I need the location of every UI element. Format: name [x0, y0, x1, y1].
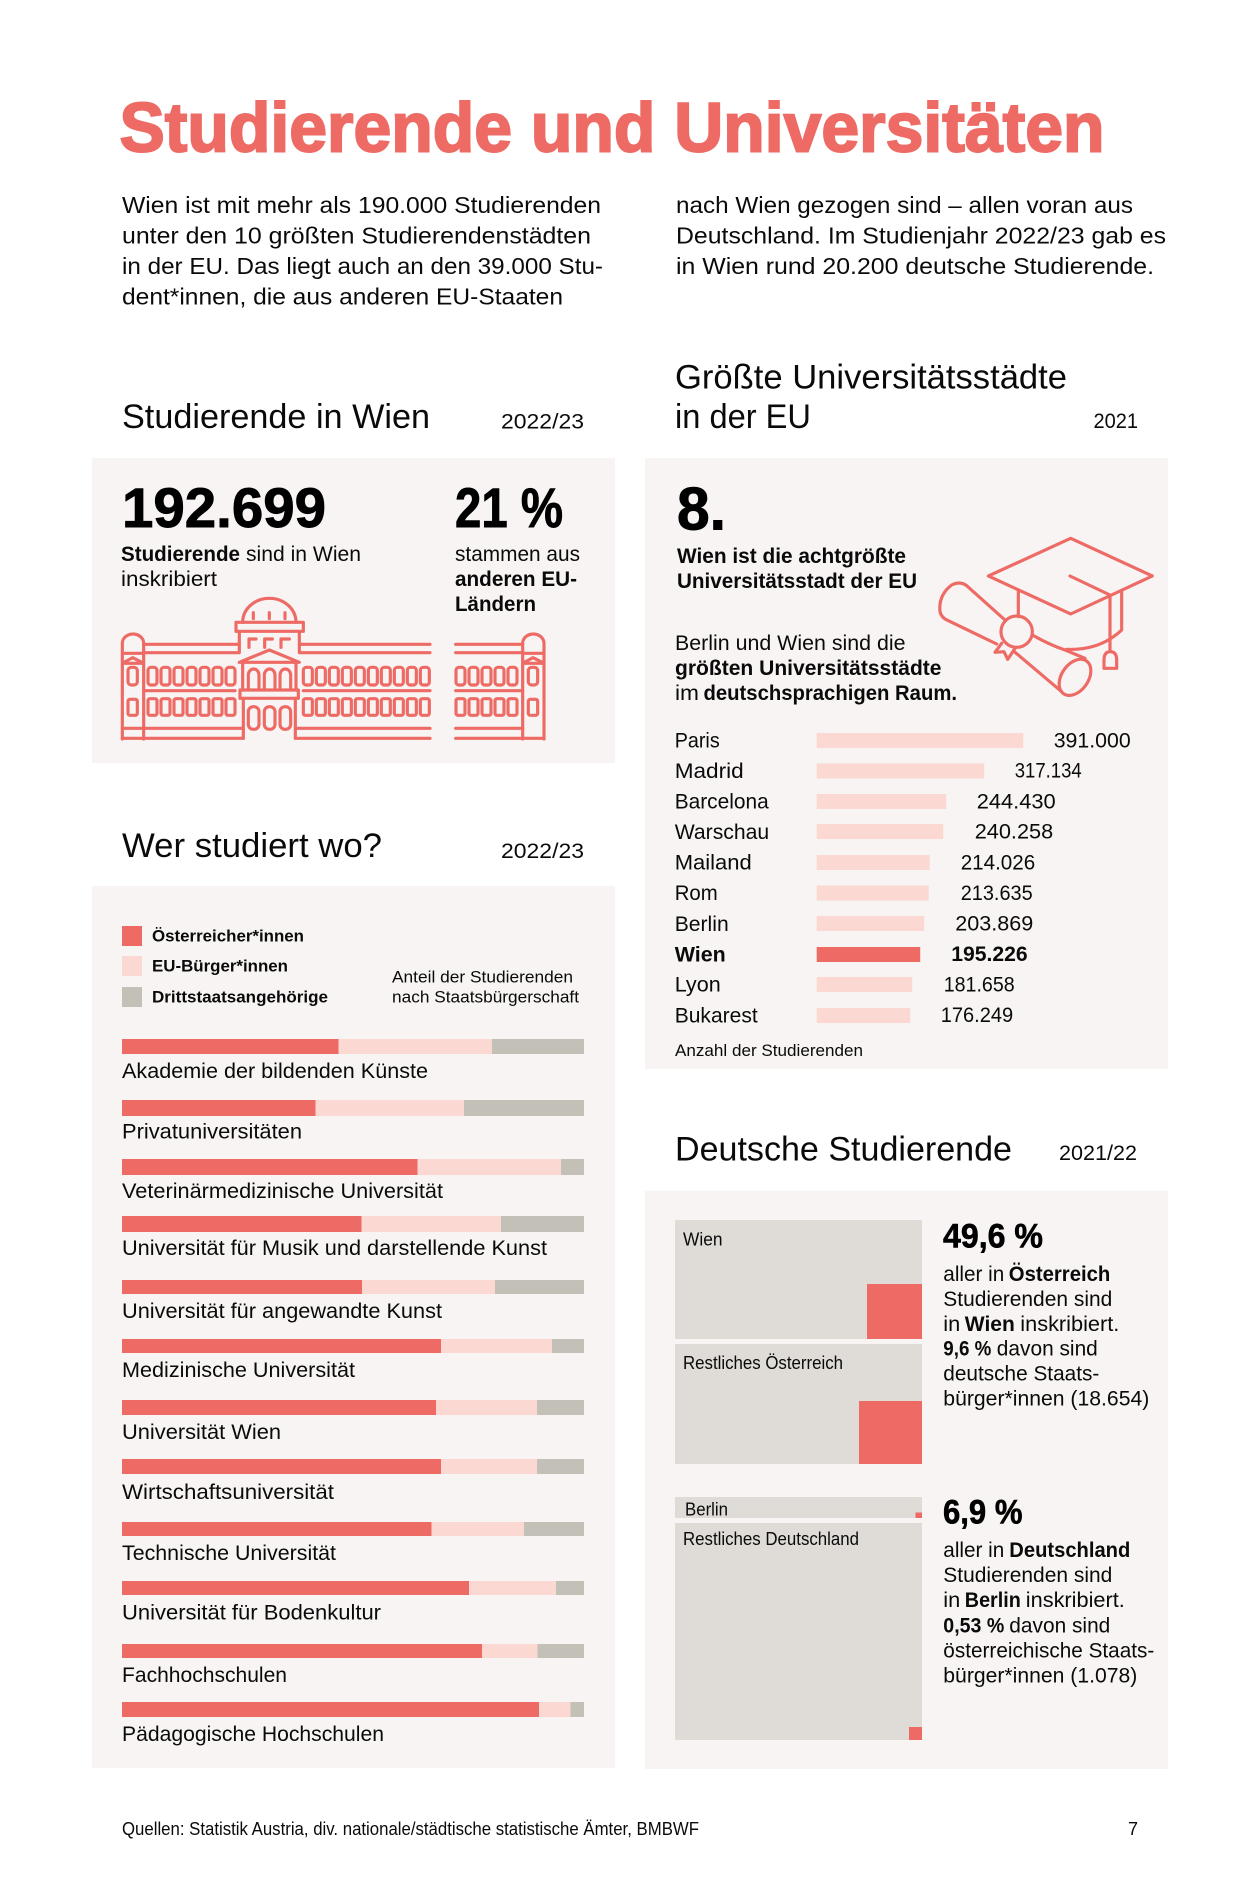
- intro text right column: [676, 192, 1166, 279]
- row: Universität für angewandte Kunst: [122, 1280, 584, 1323]
- row: Madrid: Madrid: [675, 760, 744, 783]
- stat text: Deutschland: aller in: [943, 1539, 1004, 1562]
- row: Lyon: Lyon: [675, 974, 721, 996]
- row: Medizinische Universität: [122, 1339, 584, 1382]
- heading: Größte Universitätsstädte in der EU: Größte Universitätsstädte: [675, 358, 1067, 396]
- intro text left column: dent*innen, die aus anderen EU-Staaten: [122, 284, 563, 310]
- row: Madrid: [675, 760, 1082, 783]
- stat: 192.699: 192.699: [122, 476, 326, 539]
- panel: Größte Universitätsstädte: [645, 458, 1168, 1069]
- stat text: Deutschland: Deutschland: [1009, 1539, 1130, 1562]
- stat text: Deutschland: 0,53 %: [943, 1614, 1005, 1638]
- row: Technische Universität: [122, 1522, 584, 1565]
- row: Bukarest: 176.249: [941, 1004, 1013, 1027]
- stat text: Studierende: sind in Wien: [246, 543, 361, 566]
- intro text right column: Deutschland. Im Studienjahr 2022/23 gab es: [676, 223, 1166, 249]
- heading: Wer studiert wo?: Wer studiert wo?: [122, 827, 382, 865]
- panel: Deutsche Studierende: [645, 1190, 1168, 1769]
- row: Lyon: 181.658: [944, 974, 1015, 996]
- row: Warschau: [675, 820, 1053, 844]
- row: Wien: Wien: [675, 944, 726, 966]
- row: Veterinärmedizinische Universität: [122, 1159, 584, 1203]
- stat text: Österreich: 9,6 %: [943, 1338, 992, 1360]
- stat text: Deutschland: österreichische Staats-: [943, 1640, 1154, 1662]
- stat text: Österreich: Studierenden sind: [943, 1288, 1112, 1311]
- legend: EU-Bürger*innen: [152, 958, 288, 976]
- treemap: Wien and Österreich: Restliches Österreich: [683, 1353, 843, 1373]
- row: Warschau: Warschau: [675, 821, 769, 844]
- icon: graduation cap and diploma: [940, 538, 1152, 701]
- text: Berlin und Wien: Berlin und Wien sind die: [675, 632, 906, 655]
- treemap: Berlin and Deutschland: Restliches Deutschland: [683, 1529, 859, 1549]
- chart note: nach Staatsbürgerschaft: [392, 988, 579, 1007]
- stat text: Studierende: [121, 543, 361, 591]
- year label: 2022/23: [501, 840, 584, 863]
- chart note: Anzahl der Studierenden: [675, 1041, 863, 1060]
- row: Technische Universität: Technische Universität: [122, 1542, 336, 1565]
- text: Berlin und Wien: im: [675, 682, 699, 705]
- row: Barcelona: [675, 790, 1056, 814]
- row: Privatuniversitäten: [122, 1100, 584, 1144]
- row: Lyon: [675, 974, 1015, 996]
- row: Fachhochschulen: [122, 1644, 584, 1687]
- stat text: EU: anderen EU-: [455, 568, 577, 591]
- text: Berlin und Wien: größten Universitätsstädte: [675, 657, 942, 680]
- stat text: Deutschland: bürger*innen (1.078): [943, 1664, 1137, 1688]
- chart note: Anteil der Studierenden: [392, 968, 573, 987]
- row: Paris: [675, 730, 1131, 752]
- intro text left column: in der EU. Das liegt auch an den 39.000 Stu-: [122, 253, 603, 279]
- row: Universität für Musik und darstellende Kunst: Universität für Musik und darstellende Kunst: [122, 1237, 547, 1260]
- intro text right column: nach Wien gezogen sind – allen voran aus: [676, 192, 1133, 218]
- stat text: Österreich: bürger*innen (18.654): [943, 1388, 1149, 1410]
- stat text: Wien ist die achtgrößte: [677, 545, 906, 568]
- text: Berlin und Wien: deutschsprachigen Raum.: [704, 682, 957, 705]
- stat text: Deutschland: in: [943, 1589, 960, 1612]
- stat text: Deutschland: Berlin: [965, 1589, 1021, 1612]
- row: Pädagogische Hochschulen: [122, 1702, 584, 1746]
- row: Paris: 391.000: [1054, 730, 1131, 752]
- stat text: Studierende: Studierende: [121, 543, 240, 566]
- stat text: EU: stammen aus: [455, 543, 580, 566]
- stat text: EU: [455, 543, 580, 616]
- stat text: EU: Ländern: [455, 593, 536, 616]
- stat text: Österreich: davon sind: [997, 1338, 1098, 1360]
- legend: [122, 926, 328, 1007]
- intro text left column: Wien ist mit mehr als 190.000 Studierenden: [122, 192, 601, 218]
- row: Berlin: [675, 912, 1033, 936]
- treemap: Berlin and Deutschland: Berlin: [685, 1500, 728, 1520]
- row: Barcelona: 244.430: [977, 790, 1056, 814]
- row: Universität für Musik und darstellende Kunst: [122, 1216, 584, 1260]
- row: Rom: Rom: [675, 882, 718, 905]
- stat text: Österreich: inskribiert.: [1020, 1313, 1119, 1336]
- stat text: Deutschland: [943, 1539, 1154, 1688]
- treemap: Berlin and Deutschland: [675, 1497, 922, 1740]
- row: Rom: 213.635: [961, 882, 1033, 905]
- stat: 8.: 8.: [677, 476, 726, 542]
- row: Warschau: 240.258: [975, 820, 1053, 844]
- stacked bar chart: [122, 1039, 584, 1746]
- row: Mailand: [675, 852, 1035, 874]
- stat text: Österreich: deutsche Staats-: [943, 1362, 1099, 1386]
- heading: Studierende in Wien: Studierende in Wien: [122, 398, 430, 436]
- row: Mailand: Mailand: [675, 852, 752, 874]
- row: Universität für angewandte Kunst: Universität für angewandte Kunst: [122, 1300, 442, 1323]
- heading: Größte Universitätsstädte in der EU: [675, 358, 1067, 436]
- row: Universität Wien: Universität Wien: [122, 1421, 281, 1444]
- page number: 7: [1128, 1819, 1138, 1839]
- stat text: Österreich: in: [943, 1313, 960, 1336]
- treemap: Wien and Österreich: Wien: [683, 1230, 722, 1250]
- row: Wien: 195.226: [951, 943, 1028, 966]
- row: Berlin: 203.869: [955, 912, 1033, 936]
- row: Berlin: Berlin: [675, 913, 729, 936]
- year label: 2022/23: [501, 410, 584, 434]
- row: Universität Wien: [122, 1400, 584, 1444]
- stat text: Universitätsstadt der EU: [677, 570, 917, 593]
- stat text: Österreich: aller in: [943, 1263, 1004, 1286]
- treemap: Wien and Österreich: [675, 1220, 922, 1464]
- year label: 2021: [1094, 410, 1138, 433]
- year label: 2021/22: [1059, 1142, 1137, 1165]
- row: Veterinärmedizinische Universität: Veterinärmedizinische Universität: [122, 1180, 443, 1203]
- row: Akademie der bildenden Künste: Akademie der bildenden Künste: [122, 1060, 428, 1083]
- stat text: Österreich: Österreich: [1009, 1263, 1110, 1286]
- row: Pädagogische Hochschulen: Pädagogische Hochschulen: [122, 1723, 384, 1746]
- stat text: Österreich: [943, 1263, 1149, 1410]
- row: Mailand: 214.026: [961, 852, 1035, 874]
- row: Universität für Bodenkultur: [122, 1581, 584, 1624]
- intro text left column: unter den 10 größten Studierendenstädten: [122, 223, 591, 249]
- intro text right column: in Wien rund 20.200 deutsche Studierende.: [676, 253, 1154, 279]
- stat: 49,6 %: 49,6 %: [943, 1218, 1043, 1256]
- panel: Studierende in Wien: [92, 458, 615, 763]
- stat text: Deutschland: davon sind: [1009, 1614, 1110, 1638]
- heading: Deutsche Studierende: Deutsche Studierende: [675, 1130, 1012, 1168]
- row: Bukarest: Bukarest: [675, 1004, 758, 1028]
- row: Medizinische Universität: Medizinische Universität: [122, 1359, 355, 1382]
- row: Rom: [675, 882, 1033, 905]
- stat: 6,9 %: 6,9 %: [943, 1494, 1022, 1532]
- title: Studierende und Universitäten: [120, 88, 1104, 166]
- text: Berlin und Wien: [675, 632, 957, 705]
- stat text: Deutschland: inskribiert.: [1026, 1589, 1125, 1612]
- chart note: [392, 968, 579, 1007]
- stat text: Österreich: Wien: [965, 1313, 1015, 1336]
- row: Madrid: 317.134: [1015, 760, 1082, 782]
- source note: Quellen: Statistik Austria, div. nationale/städtische statistische Ämter, BMBWF: [122, 1819, 699, 1839]
- stat text: [677, 545, 917, 593]
- legend: Drittstaatsangehörige: [152, 988, 328, 1006]
- row: Akademie der bildenden Künste: [122, 1039, 584, 1083]
- legend: Österreicher*innen: [152, 927, 304, 946]
- heading: Größte Universitätsstädte in der EU: in der EU: [675, 398, 811, 436]
- icon: university building: [122, 598, 544, 739]
- row: Wien: [675, 943, 1028, 966]
- panel: Wer studiert wo: [92, 886, 615, 1768]
- row: Bukarest: [675, 1004, 1013, 1028]
- stat text: Studierende: inskribiert: [121, 568, 217, 591]
- row: Fachhochschulen: Fachhochschulen: [122, 1664, 287, 1687]
- bar chart: cities: [675, 730, 1131, 1028]
- row: Wirtschaftsuniversität: [122, 1459, 584, 1504]
- stat text: Deutschland: Studierenden sind: [943, 1564, 1112, 1587]
- row: Barcelona: Barcelona: [675, 790, 769, 814]
- stat: 21 %: 21 %: [455, 476, 563, 539]
- row: Universität für Bodenkultur: Universität für Bodenkultur: [122, 1602, 381, 1624]
- row: Paris: Paris: [675, 730, 720, 752]
- row: Wirtschaftsuniversität: Wirtschaftsuniversität: [122, 1481, 334, 1504]
- row: Privatuniversitäten: Privatuniversitäten: [122, 1120, 302, 1144]
- intro text left column: [122, 192, 603, 310]
